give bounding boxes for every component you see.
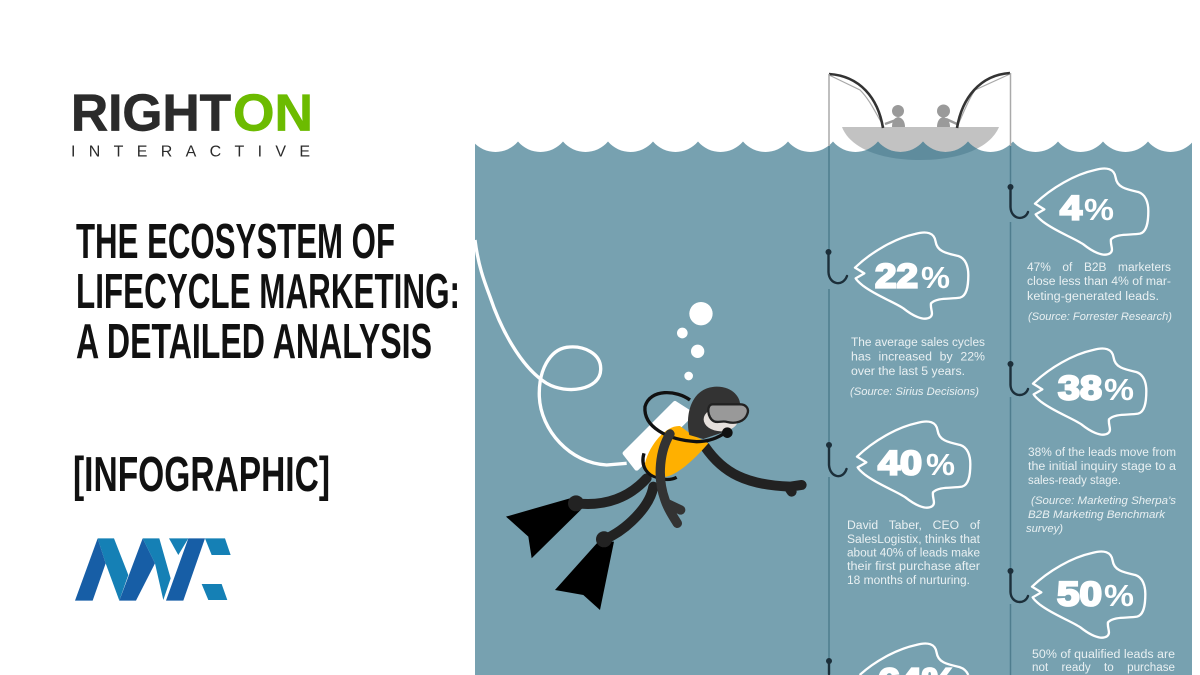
stat: 40%: 18 months of nurturing.: [847, 575, 970, 587]
title: THE ECOSYSTEM OF: [76, 215, 395, 269]
face: [704, 407, 738, 431]
percent value: 40: [878, 444, 922, 482]
stat: 38%: [1008, 348, 1177, 535]
stat: 40%: [826, 421, 981, 587]
goggles: [708, 404, 748, 423]
stat: 4%: [1008, 168, 1172, 323]
stat: 40%: %: [926, 447, 955, 482]
diver illustration: [475, 240, 802, 610]
fish outline: [1035, 168, 1148, 255]
logo: RightOn Interactive: [71, 84, 313, 160]
stat: 38%: (Source: Marketing Sherpa's: [1031, 495, 1177, 507]
ankles: [568, 495, 612, 547]
hook: [1010, 364, 1028, 395]
title: [76, 215, 460, 369]
logo: RightOn Interactive: RIGHT: [71, 84, 231, 142]
stat: cropped fish hook and outline: [826, 643, 968, 675]
stat: 40%: about 40% of leads make: [847, 548, 980, 560]
stat: 38%: sales-ready stage.: [1028, 475, 1121, 487]
description: 50% of qualified leads are: [1032, 649, 1175, 661]
breathing hose: [645, 393, 727, 442]
stat: 40%: their first purchase after: [847, 561, 980, 573]
description: The average sales cycles: [851, 337, 985, 349]
stat: 40%: SalesLogistix, thinks that: [847, 534, 981, 546]
stat: 22%: over the last 5 years.: [851, 366, 965, 378]
subtitle tag: [INFOGRAPHIC]: [73, 448, 330, 502]
stat: 4%: close less than 4% of mar-: [1027, 276, 1171, 288]
stat: 22%: (Source: Sirius Decisions): [850, 386, 979, 398]
hook: [1010, 571, 1028, 602]
stat: 22%: has increased by 22%: [851, 352, 985, 364]
stat: 38%: B2B Marketing Benchmark: [1028, 509, 1166, 521]
fish outline: [1033, 348, 1146, 435]
stat: 4%: %: [1084, 192, 1114, 227]
description: David Taber, CEO of: [847, 520, 981, 532]
logo: MTC: [75, 538, 231, 601]
fish outline: [857, 421, 970, 508]
hook: [828, 661, 830, 674]
fish outline: [860, 643, 968, 675]
logo: RightOn Interactive: ON: [233, 84, 313, 142]
title: LIFECYCLE MARKETING:: [76, 265, 460, 319]
belt: [643, 453, 677, 479]
hook: [1010, 187, 1028, 218]
stat: 38%: the initial inquiry stage to a: [1028, 461, 1177, 473]
stat: 4%: keting-generated leads.: [1027, 291, 1159, 303]
fishing lines: [829, 73, 1010, 675]
percent value: 50: [1057, 576, 1102, 614]
legs: [577, 478, 653, 540]
mouthpiece: [722, 427, 733, 438]
near arm: [660, 434, 681, 523]
percent value: 22: [875, 258, 918, 296]
logo: RightOn Interactive: INTERACTIVE: [71, 144, 310, 160]
far arm: [705, 447, 802, 492]
bubbles: [677, 302, 713, 380]
stat: 50%: not ready to purchase: [1032, 662, 1175, 674]
stat: 22%: [826, 232, 985, 398]
air tank: [625, 403, 692, 468]
fish outline: [855, 232, 968, 319]
stat: 50%: %: [1104, 578, 1134, 613]
fins: [506, 497, 614, 610]
description: 38% of the leads move from: [1028, 447, 1176, 459]
percent value: 4: [1060, 190, 1082, 228]
hook: [828, 252, 847, 283]
boat and fishermen: [829, 73, 1010, 160]
stat: 22%: %: [921, 260, 950, 295]
stat: 38%: survey): [1026, 523, 1063, 535]
head and hood: [688, 387, 740, 439]
stat: 50%: [1008, 551, 1175, 674]
stat: 4%: (Source: Forrester Research): [1028, 311, 1172, 323]
title: A DETAILED ANALYSIS: [76, 315, 432, 369]
percent value: 38: [1058, 370, 1102, 408]
air hose: [475, 240, 627, 465]
description: 47% of B2B marketers: [1027, 262, 1171, 274]
fish outline: [1032, 551, 1145, 638]
life vest: [645, 426, 708, 477]
ocean background: [473, 130, 1195, 675]
stat: 38%: %: [1104, 372, 1134, 407]
boat hull above water: [842, 127, 999, 160]
hook: [829, 445, 846, 476]
